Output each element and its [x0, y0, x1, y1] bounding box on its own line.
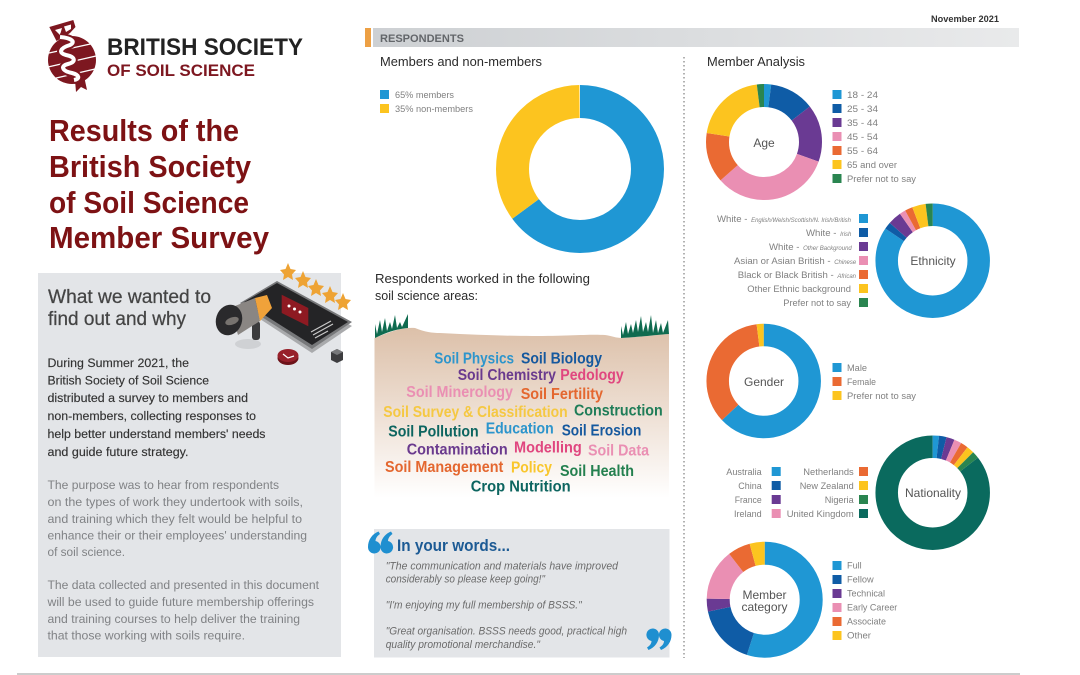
icon: opening quote mark: [368, 532, 393, 553]
word cloud: soil science areas: Soil Health: [560, 463, 634, 480]
word cloud: soil science areas: Education: [486, 421, 554, 438]
text block: quotes: "Great organisation. BSSS needs good, practical high: [386, 626, 627, 638]
text block: purpose: enhance their or their employees' understanding: [48, 528, 307, 542]
legend: ethnicity: Prefer not to say: [783, 298, 851, 309]
text block: purpose: on the types of work they undertook with soils,: [48, 495, 303, 509]
text block: purpose: [48, 478, 307, 559]
legend: gender: Prefer not to say: [847, 391, 916, 402]
logo: British Society of Soil Science: [48, 20, 303, 92]
panel: what we wanted to find out and why: [38, 273, 341, 657]
text block: intro: [48, 356, 266, 459]
heading: member analysis: Member Analysis: [707, 54, 805, 69]
word cloud: soil science areas: Soil Fertility: [521, 386, 603, 403]
text block: quotes: [386, 560, 627, 651]
legend: ethnicity: [717, 214, 868, 309]
heading: soil science areas: Respondents worked in the following: [375, 271, 590, 286]
text block: purpose: The purpose was to hear from respondents: [48, 478, 279, 492]
legend: age: 65 and over: [847, 160, 898, 171]
text block: intro: British Society of Soil Science: [48, 374, 209, 388]
legend: gender: Male: [847, 363, 867, 374]
donut chart: members and non-members: [512, 102, 648, 236]
legend: age: 45 - 54: [847, 132, 879, 143]
legend: ethnicity: White - Irish: [806, 228, 852, 239]
soil illustration with grass: [374, 314, 669, 498]
legend: age: 18 - 24: [847, 90, 879, 101]
text block: quotes: "I'm enjoying my full membership of BSSS.": [386, 600, 583, 612]
legend: age: 25 - 34: [847, 104, 879, 115]
legend: nationality: [726, 467, 868, 520]
legend: ethnicity: White - English/Welsh/Scottish/N. Irish/British: [717, 214, 852, 225]
date: November 2021: [931, 14, 1000, 25]
word cloud: soil science areas: Modelling: [514, 440, 582, 457]
legend: age: 55 - 64: [847, 146, 879, 157]
word cloud: soil science areas: Soil Biology: [521, 350, 602, 367]
donut chart: ethnicity: [887, 215, 979, 307]
word cloud: soil science areas: Construction: [574, 403, 663, 420]
legend: member category: Other: [847, 630, 872, 642]
heading: soil science areas: soil science areas:: [375, 288, 478, 303]
text block: data use: will be used to guide future membership offerings: [47, 595, 314, 609]
word cloud: soil science areas: Soil Pollution: [388, 423, 479, 440]
heading: soil science areas: [375, 271, 590, 303]
text block: intro: non-members, collecting responses to: [48, 409, 256, 423]
legend: ethnicity: Black or Black British - African: [738, 270, 857, 281]
title: [49, 113, 270, 255]
word cloud: soil science areas: [383, 350, 663, 495]
donut chart: member category: [718, 553, 811, 646]
legend: gender: Female: [847, 377, 876, 388]
word cloud: soil science areas: Soil Minerology: [406, 384, 513, 401]
text block: quotes: considerably so please keep going!": [386, 574, 546, 586]
word cloud: soil science areas: Policy: [511, 460, 552, 477]
word cloud: soil science areas: Crop Nutrition: [471, 478, 571, 495]
legend: member category: Early Career: [847, 602, 898, 614]
legend: age: [832, 90, 916, 185]
text block: intro: and guide future strategy.: [48, 445, 188, 459]
heading: members and non-members: Members and non-members: [380, 54, 542, 69]
heading: what we wanted: What we wanted to: [48, 287, 211, 308]
donut chart: nationality: [887, 447, 979, 539]
text block: data use: The data collected and presented in this document: [48, 578, 320, 592]
legend: ethnicity: White - Other Background: [769, 242, 852, 253]
donut chart: gender: [718, 335, 810, 427]
legend: nationality: Ireland: [734, 509, 762, 520]
text block: purpose: and training which they felt would be helpful to: [48, 512, 302, 526]
text block: purpose: of soil science.: [48, 545, 125, 559]
text block: intro: distributed a survey to members and: [48, 391, 248, 405]
logo: British Society of Soil Science: OF SOIL SCIENCE: [107, 61, 255, 80]
logo: British Society of Soil Science: BRITISH SOCIETY: [107, 34, 303, 61]
text block: data use: and training courses to help deliver the training: [48, 612, 300, 626]
title: Results of the: [49, 113, 239, 148]
donut chart: age: [718, 96, 810, 188]
legend: member category: Fellow: [847, 574, 874, 586]
section header: respondents: RESPONDENTS: [380, 33, 464, 45]
word cloud: soil science areas: Contamination: [407, 442, 508, 459]
word cloud: soil science areas: Soil Physics: [434, 350, 514, 367]
panel: in your words: [368, 529, 672, 658]
word cloud: soil science areas: Soil Data: [588, 443, 649, 460]
legend: nationality: Netherlands: [803, 467, 854, 478]
donut chart: nationality: Nationality: [905, 486, 961, 500]
legend: nationality: Australia: [726, 467, 762, 478]
section header: respondents: [365, 28, 1019, 47]
legend: members: 65% members: [395, 90, 454, 101]
donut chart: ethnicity: Ethnicity: [910, 254, 956, 268]
legend: nationality: China: [738, 481, 762, 492]
text block: intro: help better understand members' needs: [48, 427, 266, 441]
word cloud: soil science areas: Soil Survey & Classification: [383, 404, 568, 421]
legend: members: 35% non-members: [395, 104, 473, 115]
legend: member category: [832, 560, 898, 642]
text block: intro: During Summer 2021, the: [48, 356, 189, 370]
icon: megaphone and phone with five stars: [212, 263, 352, 365]
legend: members: [380, 90, 473, 115]
legend: ethnicity: Asian or Asian British - Chinese: [734, 256, 857, 267]
legend: gender: [832, 363, 916, 402]
text block: data use: that those working with soils require.: [48, 628, 245, 642]
title: British Society: [49, 149, 252, 184]
word cloud: soil science areas: Soil Erosion: [562, 423, 641, 440]
legend: nationality: Nigeria: [825, 495, 854, 506]
word cloud: soil science areas: Soil Chemistry: [458, 367, 556, 384]
text block: quotes: "The communication and materials have improved: [386, 560, 619, 572]
donut chart: age: Age: [753, 136, 775, 150]
legend: nationality: France: [735, 495, 762, 506]
title: of Soil Science: [49, 185, 249, 220]
legend: member category: Technical: [847, 588, 885, 600]
legend: age: 35 - 44: [847, 118, 879, 129]
legend: member category: Full: [847, 560, 862, 572]
title: Member Survey: [49, 220, 270, 255]
legend: age: Prefer not to say: [847, 174, 916, 185]
heading: in your words: In your words...: [397, 536, 510, 555]
icon: closing quote mark: [646, 629, 672, 650]
donut chart: member category: Member: [742, 588, 787, 602]
legend: ethnicity: Other Ethnic background: [747, 284, 851, 295]
word cloud: soil science areas: Pedology: [560, 367, 624, 384]
word cloud: soil science areas: Soil Management: [385, 459, 504, 476]
heading: what we wanted: find out and why: [48, 309, 186, 330]
legend: nationality: New Zealand: [800, 481, 854, 492]
text block: data use: [47, 578, 320, 642]
heading: what we wanted: [48, 287, 211, 330]
legend: member category: Associate: [847, 616, 886, 628]
donut chart: gender: Gender: [744, 375, 784, 389]
legend: nationality: United Kingdom: [787, 509, 854, 520]
donut chart: member category: category: [741, 600, 788, 614]
text block: quotes: quality promotional merchandise.": [386, 639, 541, 651]
